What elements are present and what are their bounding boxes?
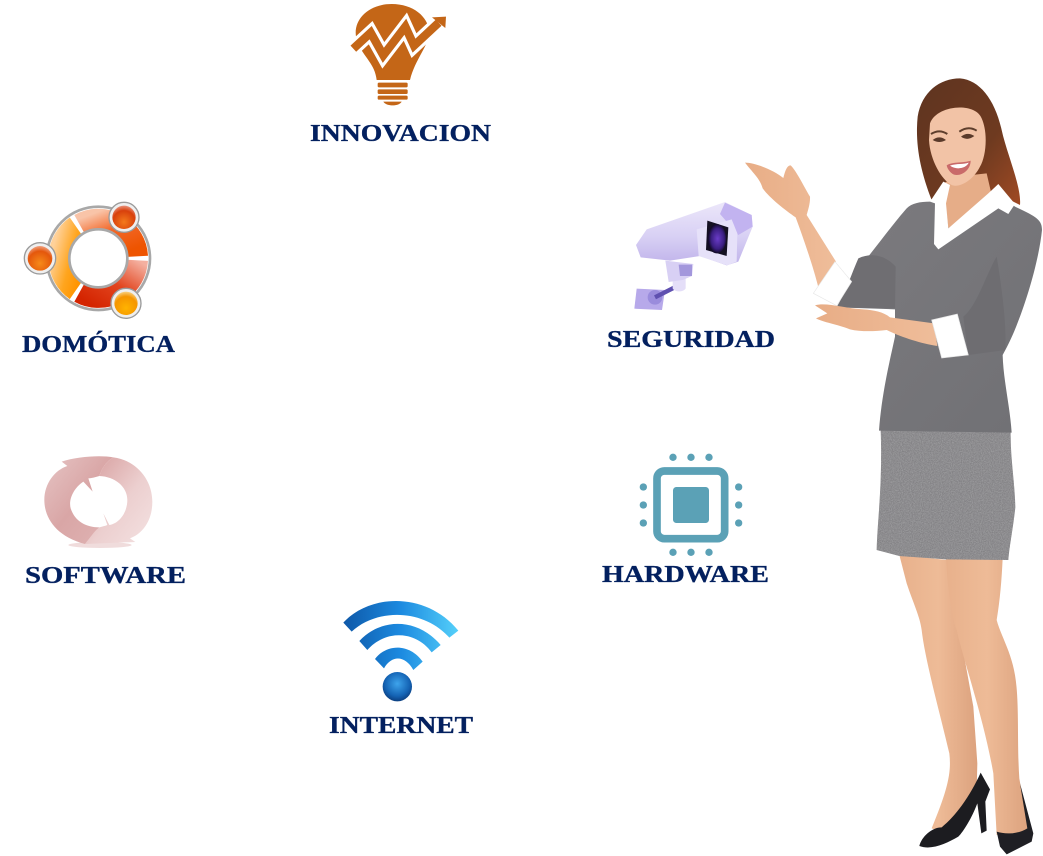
lower body: skirt, legs, shoes — [877, 429, 1033, 854]
icon: wifi signal — [343, 601, 458, 701]
raised arm cuff — [813, 262, 852, 306]
lower arm cuff — [932, 314, 968, 358]
hair back — [917, 78, 1020, 205]
collar — [930, 182, 1015, 249]
sweater torso and sleeves — [837, 193, 1042, 433]
item: internet — [329, 601, 473, 739]
label: hardware: HARDWARE — [602, 562, 769, 588]
lower forearm and hand — [815, 304, 937, 346]
right sleeve shadow — [963, 257, 1006, 355]
eyes, brows, mouth — [931, 128, 977, 175]
label: software: SOFTWARE — [25, 563, 186, 589]
sleeve fold shadow — [837, 255, 896, 308]
raised arm and hand — [745, 163, 836, 287]
item: innovacion — [310, 4, 492, 147]
label: internet: INTERNET — [329, 713, 473, 739]
item: seguridad — [607, 202, 775, 353]
icon: circular arrows — [44, 456, 152, 548]
label: innovacion: INNOVACION — [310, 121, 492, 147]
item: software — [25, 456, 186, 589]
icon: light bulb with rising arrow — [353, 4, 446, 105]
neck — [943, 173, 992, 228]
face — [929, 108, 986, 186]
label: seguridad: SEGURIDAD — [607, 327, 775, 353]
icon: security camera — [634, 202, 753, 310]
icon: microchip — [640, 454, 742, 556]
item: hardware — [602, 454, 769, 588]
label: domotica: DOMÓTICA — [22, 331, 176, 358]
icon: orange ring with three nodes — [24, 202, 150, 318]
upper body: arms, sweater, collar, head — [745, 78, 1042, 433]
figure: presenter woman — [745, 78, 1042, 854]
item: domotica — [22, 202, 176, 358]
